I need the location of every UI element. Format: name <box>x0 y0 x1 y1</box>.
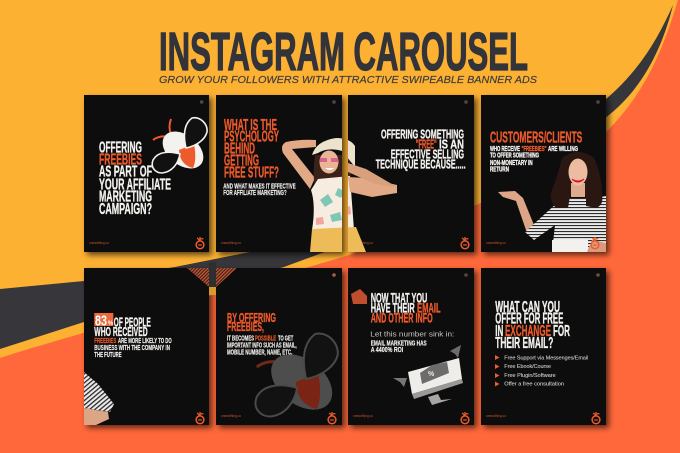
panel: card 8 what can you offer <box>481 268 606 425</box>
text block: card 4 <box>490 146 578 174</box>
heading: card 8: IN <box>495 323 503 340</box>
heading: card 8: WHAT CAN YOU <box>495 299 560 316</box>
list: free offers: Offer a free consultation <box>504 382 564 388</box>
heading: card 2: PSYCHOLOGY <box>224 129 279 146</box>
heading: card 6: BY OFFERING <box>227 310 276 325</box>
heading: card 2: FREE STUFF? <box>224 165 279 182</box>
text block: card 5: WHO RECEIVED <box>94 324 148 339</box>
heading: card 1: OFFERING <box>99 140 142 157</box>
panel: card 6 by offering freebies: oneadthing.co <box>221 414 241 418</box>
text block: card 6: POSSIBLE <box>255 335 276 342</box>
panel: card 3 free technique <box>348 95 474 252</box>
text block: card 5 <box>94 315 172 359</box>
panel: card 2 psychology: oneadthing.co <box>221 241 241 245</box>
heading: card 1: AS PART OF <box>99 164 152 181</box>
text block: card 5: BUSINESS WITH THE COMPANY IN <box>94 345 170 352</box>
heading: card 8 <box>495 299 570 352</box>
heading: card 7: HAVE THEIR <box>371 301 415 316</box>
text block: card 4: ARE WILLING <box>548 146 578 153</box>
list: free offers <box>495 355 588 388</box>
heading: card 8: THEIR EMAIL? <box>495 335 553 352</box>
panel: card 7 email <box>348 268 474 425</box>
text block: card 4: NON-MONETARY IN <box>490 160 533 167</box>
list: free offers: Free Support via Messenges/Email <box>504 355 588 361</box>
heading: card 3: TECHNIQUE BECAUSE..... <box>376 157 466 172</box>
text block: card 5: THE FUTURE <box>94 352 122 359</box>
heading: card 2: BEHIND <box>224 140 255 157</box>
heading: card 1: YOUR AFFILIATE <box>99 176 171 193</box>
text block: card 7: Let this number sink in: <box>370 330 454 339</box>
heading: card 3: OFFERING SOMETHING <box>381 126 464 141</box>
text block: card 4: TO OFFER SOMETHING <box>490 153 539 160</box>
text block: card 6 <box>227 335 297 356</box>
heading: card 3: EFFECTIVE SELLING <box>391 146 464 161</box>
list: free offers: Free Plugin/Software <box>504 373 556 379</box>
text block: card 6: MOBILE NUMBER, NAME, ETC. <box>227 349 292 356</box>
background: dark swoosh top right <box>590 5 673 123</box>
icon: computer with email <box>393 345 463 405</box>
text block: card 4: WHO RECEIVE <box>490 146 520 153</box>
heading: card 7: AND OTHER INFO <box>371 310 433 325</box>
text block: card 5: OF PEOPLE <box>114 315 151 330</box>
text block: card 2 subheading: FOR AFFILIATE MARKETING? <box>223 188 287 197</box>
panel: card 1 offering freebies: oneadthing.co <box>89 241 109 245</box>
text block: card 5: ARE MORE LIKELY TO DO <box>118 338 172 345</box>
icon: faded bee <box>256 334 343 421</box>
striped funnel between cards 5 and 6 <box>187 262 237 295</box>
text block: card 7: EMAIL MARKETING HAS <box>371 340 427 347</box>
heading: card 3: "FREE" <box>416 136 437 151</box>
heading: card 1: MARKETING <box>99 189 152 206</box>
icon: computer with email: % <box>428 371 435 378</box>
heading: card 2: WHAT IS THE <box>224 117 277 134</box>
photo: smiling woman <box>498 152 606 252</box>
callout: 83 percent: 83 <box>95 312 107 330</box>
panel: card 4 customers and clients <box>481 95 606 252</box>
list: free offers: Free Ebook/Course <box>504 364 551 370</box>
heading: card 1: CAMPAIGN? <box>99 201 152 218</box>
heading: card 8: OFFER FOR FREE <box>495 311 563 328</box>
heading: card 3: IS AN <box>439 136 464 151</box>
text block: card 7 <box>370 330 454 354</box>
background: dark band lower left <box>0 250 330 349</box>
panel: card 2 psychology <box>216 95 342 252</box>
heading: card 4: CUSTOMERS/CLIENTS <box>490 129 582 146</box>
heading: card 8: FOR <box>553 323 570 340</box>
text block: card 4: "FREEBIES" <box>522 146 546 153</box>
text block: card 2 subheading: AND WHAT MAKES IT EFFECTIVE <box>223 181 296 190</box>
heading: card 7 <box>371 291 441 325</box>
callout: 83 percent: % <box>108 321 114 327</box>
text block: card 6: IMPORTANT INFO SUCH AS EMAIL, <box>227 342 297 349</box>
panel: card 5 statistic <box>84 268 209 425</box>
icon: envelope badge <box>351 289 367 304</box>
subtitle: GROW YOUR FOLLOWERS WITH ATTRACTIVE SWIPEABLE BANNER ADS <box>159 75 538 86</box>
background: yellow swoosh <box>0 0 678 358</box>
heading: card 7: EMAIL <box>417 301 441 316</box>
icon: bee <box>152 118 210 176</box>
panel: card 8 what can you offer: oneadthing.co <box>486 414 506 418</box>
heading: card 2: GETTING <box>224 153 259 170</box>
heading: card 2 <box>224 117 279 182</box>
heading: card 3 <box>376 126 466 172</box>
heading: card 8: EXCHANGE <box>505 323 551 340</box>
heading: card 1: FREEBIES <box>99 152 142 169</box>
text block: card 2 subheading <box>223 181 296 197</box>
heading: card 6 <box>227 310 276 334</box>
text block: card 5: FREEBIES <box>94 338 117 345</box>
panel: card 7 email: oneadthing.co <box>353 414 373 418</box>
text block: card 6: IT BECOMES <box>227 335 254 342</box>
heading: card 6: FREEBIES, <box>227 319 264 334</box>
text block: card 6: TO GET <box>278 335 294 342</box>
panel: card 6 by offering freebies <box>216 268 343 425</box>
photo: striped sleeve arm <box>84 372 114 425</box>
text block: card 7: A 4400% ROI <box>371 347 403 354</box>
panel: card 4 customers and clients: oneadthing.co <box>486 241 506 245</box>
photo: woman with hat across cards 2 and 3 <box>282 138 397 252</box>
panel: card 1 offering freebies <box>84 95 210 252</box>
heading: card 7: NOW THAT YOU <box>371 291 427 306</box>
text block: card 4: RETURN <box>490 167 509 174</box>
panel: card 3 free technique: oneadthing.co <box>353 241 373 245</box>
heading: card 1 <box>99 140 171 218</box>
